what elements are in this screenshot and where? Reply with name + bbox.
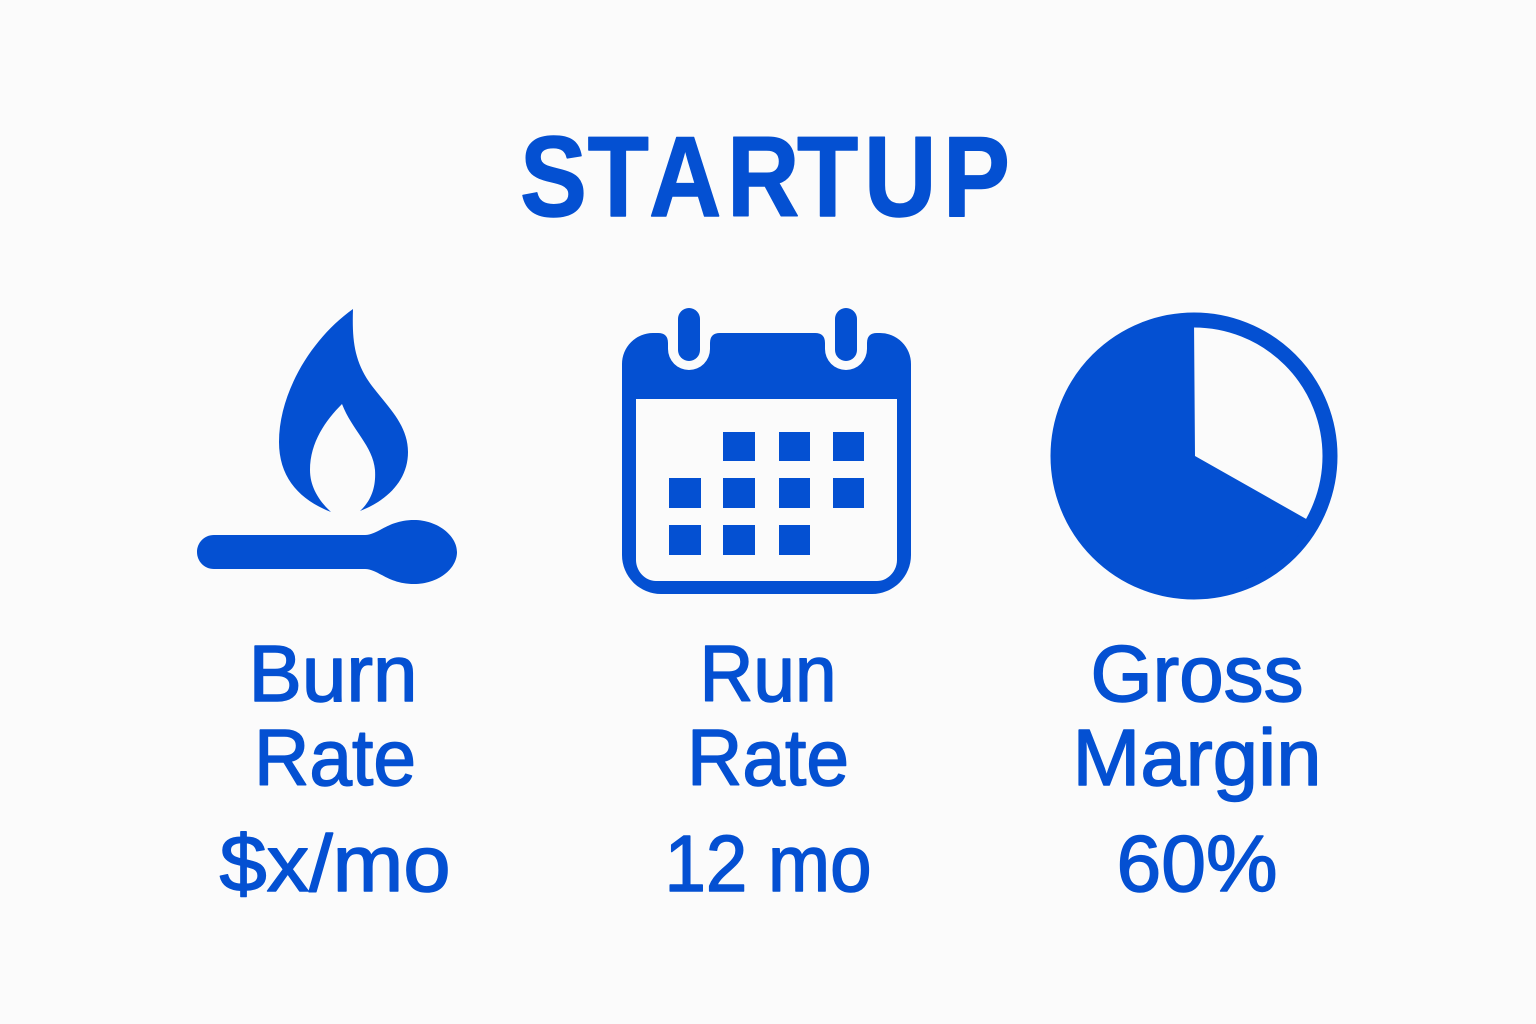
panel: gross margin — [1052, 320, 1330, 908]
value: run rate: 12 mo — [664, 819, 872, 908]
label: gross: Gross — [1090, 629, 1304, 718]
label: run: Run — [700, 629, 836, 718]
icon: pie chart — [1052, 320, 1330, 592]
panel: run rate — [622, 308, 911, 908]
label: rate: Rate — [254, 713, 416, 802]
icon: flame over match — [197, 309, 457, 584]
panel: burn rate — [197, 309, 457, 908]
label: margin: Margin — [1072, 713, 1322, 802]
label: burn: Burn — [248, 629, 418, 718]
value: gross margin: 60% — [1116, 819, 1278, 908]
label: rate: Rate — [687, 713, 849, 802]
title: STARTUP — [520, 113, 1010, 240]
icon: calendar — [622, 308, 911, 594]
value: burn rate: $x/mo — [220, 819, 450, 908]
